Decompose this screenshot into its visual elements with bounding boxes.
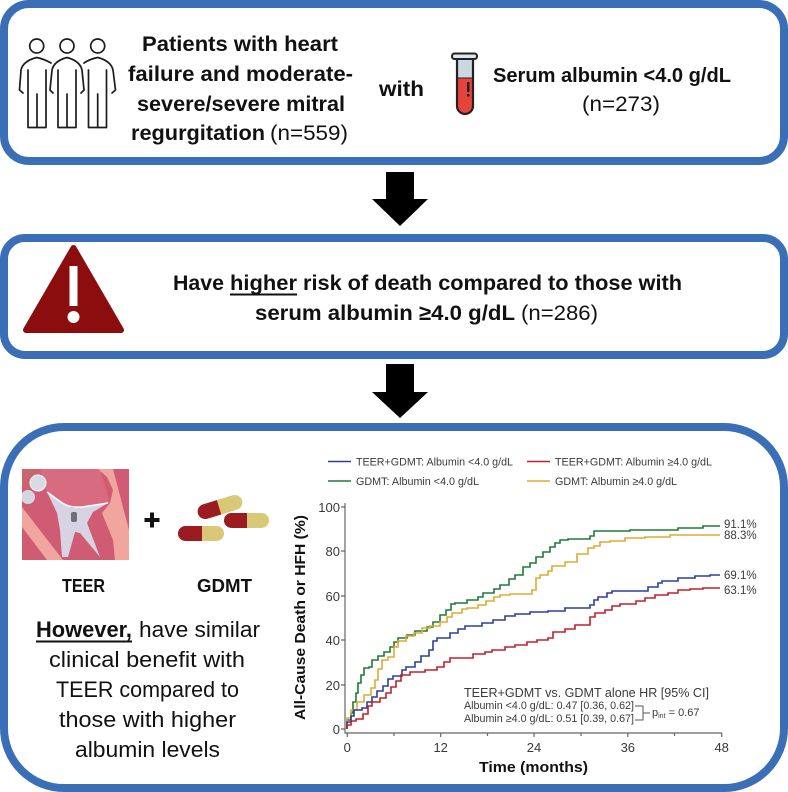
arrow: down to risk panel bbox=[372, 172, 428, 226]
curve: GDMT albumin under 4.0 bbox=[347, 526, 720, 729]
x axis tick labels: 36 bbox=[621, 740, 635, 755]
text: higher risk statement: higher bbox=[230, 271, 298, 295]
text: with: with bbox=[378, 77, 424, 101]
text: higher risk statement: serum albumin ≥4.0 g/dL bbox=[255, 301, 515, 325]
illustration: TEER clip on mitral valve bbox=[21, 469, 129, 560]
y axis tick labels: 60 bbox=[326, 589, 340, 604]
end-point labels: 69.1% bbox=[724, 570, 757, 582]
hazard ratio annotation: Albumin ≥4.0 g/dL: 0.51 [0.39, 0.67] bbox=[464, 713, 634, 725]
hazard ratio annotation: TEER+GDMT vs. GDMT alone HR [95% CI] bbox=[464, 686, 709, 700]
text: similar clinical benefit bbox=[36, 617, 261, 762]
icon: blood test tube bbox=[452, 54, 477, 114]
x axis tick labels: 24 bbox=[527, 740, 541, 755]
text: patients description: severe/severe mitral bbox=[137, 92, 345, 116]
hazard ratio annotation bbox=[464, 686, 709, 725]
x axis tick labels: 12 bbox=[433, 740, 448, 755]
chart: cumulative incidence of death or HFH bbox=[292, 456, 757, 776]
curve: GDMT albumin 4.0 or higher bbox=[347, 535, 720, 729]
end-point labels: 91.1% bbox=[724, 519, 757, 531]
hazard ratio annotation: int bbox=[658, 713, 666, 720]
axis title: all-cause death or HFH: All-Cause Death or HFH (%) bbox=[292, 515, 309, 720]
icon: GDMT capsules bbox=[178, 493, 269, 541]
legend: GDMT: Albumin ≥4.0 g/dL bbox=[555, 476, 677, 488]
text: patients description: failure and moderate- bbox=[128, 62, 353, 86]
y axis tick labels: 80 bbox=[326, 544, 340, 559]
text: similar clinical benefit: albumin levels bbox=[75, 737, 220, 762]
icon: warning triangle bbox=[26, 248, 121, 330]
x axis tick labels bbox=[344, 740, 729, 755]
axis title: time: Time (months) bbox=[479, 759, 588, 776]
x axis tick labels: 0 bbox=[344, 740, 351, 755]
text: higher risk statement: Have bbox=[173, 271, 224, 295]
text: patients description bbox=[128, 32, 353, 145]
end-point labels: 63.1% bbox=[724, 585, 757, 597]
text: higher risk statement: (n=286) bbox=[521, 301, 598, 325]
text: patients description: Patients with heart bbox=[142, 32, 338, 56]
curve: TEER+GDMT albumin 4.0 or higher bbox=[347, 588, 720, 729]
legend: TEER+GDMT: Albumin <4.0 g/dL bbox=[356, 456, 513, 468]
end-point labels: 88.3% bbox=[724, 530, 757, 542]
text: similar clinical benefit: those with higher bbox=[59, 707, 237, 732]
text: higher risk statement: risk of death compared to those with bbox=[303, 271, 682, 295]
curve: TEER+GDMT albumin under 4.0 bbox=[347, 575, 720, 729]
legend: TEER+GDMT: Albumin ≥4.0 g/dL bbox=[555, 456, 712, 468]
text: similar clinical benefit: However, bbox=[36, 617, 132, 642]
panel: higher risk bbox=[4, 238, 784, 355]
icon: plus sign bbox=[144, 512, 160, 528]
text: similar clinical benefit: TEER compared to bbox=[56, 677, 239, 702]
label: TEER: TEER bbox=[62, 576, 105, 596]
end-point labels bbox=[724, 519, 757, 597]
y axis tick labels: 20 bbox=[326, 678, 340, 693]
text: similar clinical benefit: clinical benefit with bbox=[49, 647, 245, 672]
legend bbox=[328, 456, 712, 488]
axes bbox=[341, 503, 722, 737]
hazard ratio annotation: = 0.67 bbox=[666, 707, 699, 719]
y axis tick labels: 100 bbox=[318, 500, 340, 515]
text: patients description: (n=559) bbox=[270, 121, 348, 145]
text: serum albumin criterion: Serum albumin <4.0 g/dL bbox=[493, 64, 731, 87]
text: similar clinical benefit: have similar bbox=[139, 617, 261, 642]
panel: treatment benefit bbox=[4, 427, 784, 788]
label: GDMT: GDMT bbox=[197, 576, 252, 596]
icon: three patients bbox=[20, 39, 116, 128]
text: serum albumin criterion bbox=[493, 64, 731, 116]
arrow: down to treatment panel bbox=[372, 364, 428, 418]
y axis tick labels: 40 bbox=[326, 633, 340, 648]
hazard ratio annotation: Albumin <4.0 g/dL: 0.47 [0.36, 0.62] bbox=[464, 700, 634, 712]
x axis tick labels: 48 bbox=[714, 740, 729, 755]
text: serum albumin criterion: (n=273) bbox=[582, 92, 660, 116]
text: patients description: regurgitation bbox=[131, 121, 265, 145]
panel: patient population bbox=[4, 4, 784, 161]
legend: GDMT: Albumin <4.0 g/dL bbox=[356, 476, 479, 488]
y axis tick labels bbox=[318, 500, 340, 737]
hazard ratio annotation: p bbox=[652, 707, 658, 719]
y axis tick labels: 0 bbox=[333, 722, 340, 737]
text: higher risk statement bbox=[173, 271, 682, 325]
